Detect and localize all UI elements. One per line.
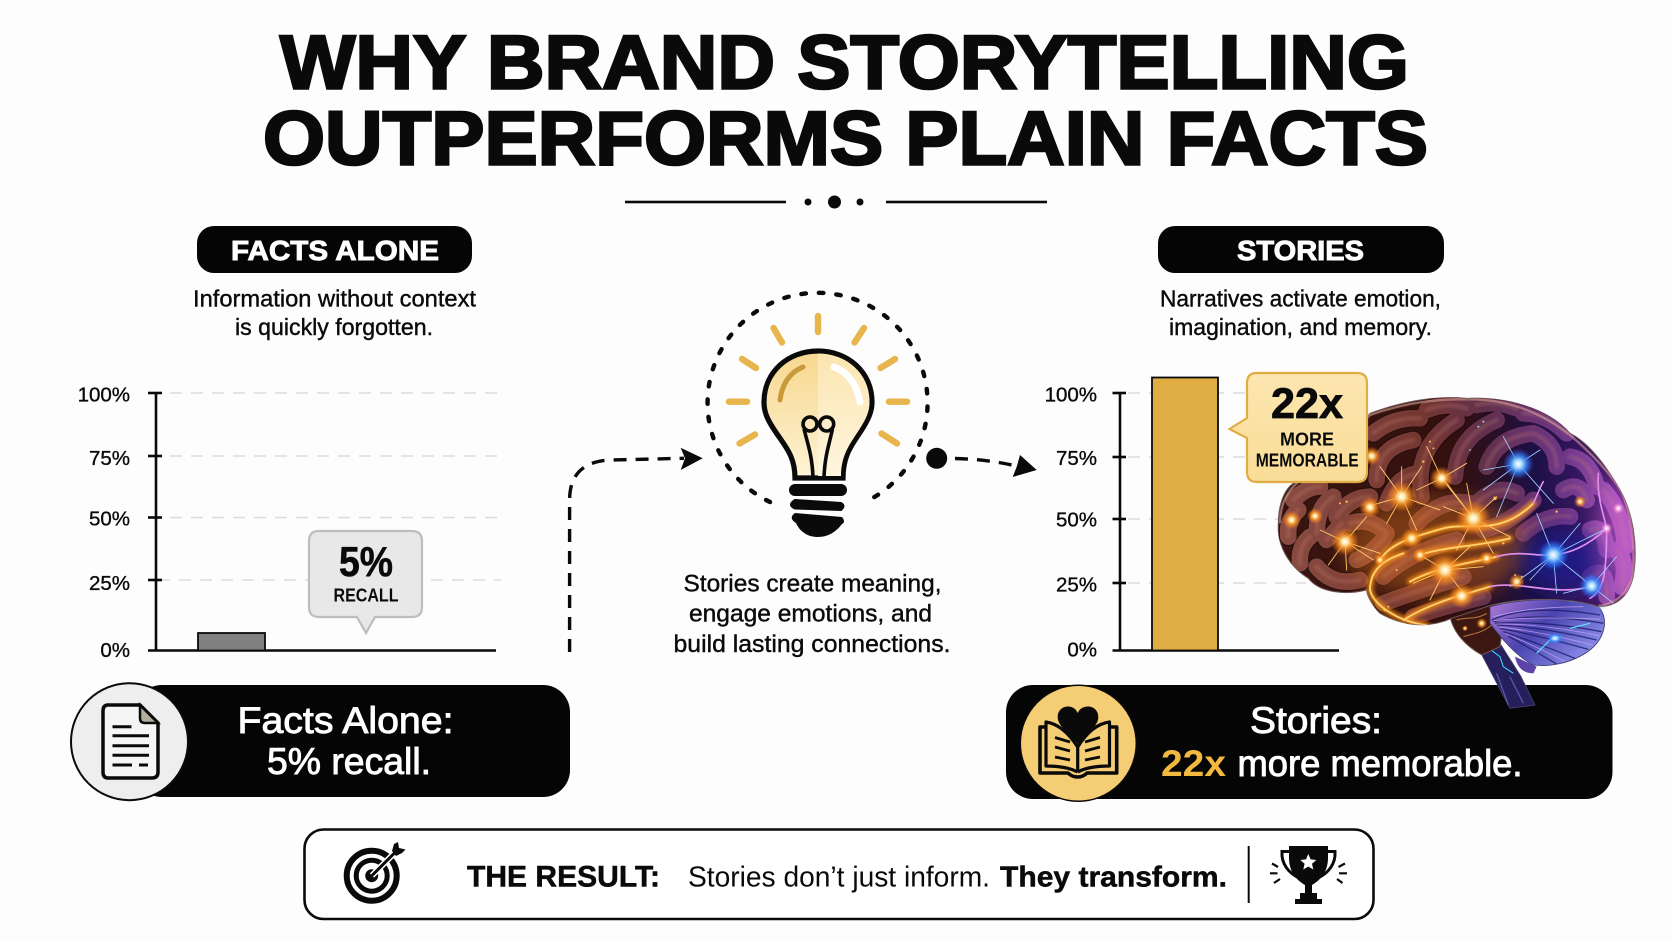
text: stories description: Narratives activate emotion, — [1160, 286, 1441, 312]
icon: book with heart — [1020, 685, 1136, 801]
bar chart: stories memorability: 100% — [1045, 384, 1097, 407]
callout: 22x more memorable: 22x — [1271, 380, 1343, 428]
bar chart: stories memorability — [1045, 378, 1339, 662]
text: facts alone description: Information without context — [193, 286, 477, 312]
arrow: dashed from facts to bulb — [570, 448, 703, 652]
icon: dotted lightbulb — [708, 293, 928, 537]
text: stories description — [1160, 286, 1441, 340]
bar chart: stories memorability: 50% — [1056, 509, 1097, 532]
heading: facts alone: FACTS ALONE — [231, 235, 439, 266]
text: facts alone description — [193, 286, 477, 340]
bar chart: facts recall: 100% — [78, 384, 130, 407]
text: center explanation: build lasting connections. — [674, 631, 950, 658]
text: the result statement: Stories don’t just inform. — [688, 862, 990, 894]
callout: 22x more memorable: MORE — [1280, 430, 1334, 450]
illustration: glowing brain — [1278, 398, 1637, 708]
text: stories description: imagination, and memory. — [1169, 314, 1432, 340]
text: center explanation — [674, 571, 950, 658]
panel: the result banner — [304, 830, 1374, 919]
text: facts alone description: is quickly forgotten. — [235, 314, 433, 340]
arrow: dashed from bulb to stories — [926, 448, 1037, 477]
bar chart: stories memorability: 75% — [1056, 447, 1097, 470]
callout: 5% recall: 5% — [339, 538, 393, 585]
bar chart: facts recall: 50% — [89, 508, 130, 531]
heading: stories: STORIES — [1237, 235, 1364, 266]
title divider — [625, 196, 1047, 208]
brain stem — [1478, 643, 1537, 708]
text: the result statement: They transform. — [1000, 862, 1227, 894]
title — [263, 20, 1428, 182]
heading: facts alone — [197, 226, 472, 273]
bar chart: facts recall — [78, 384, 501, 662]
summary pill: facts alone: Facts Alone: — [238, 700, 454, 741]
title: OUTPERFORMS PLAIN FACTS — [263, 96, 1428, 182]
text: center explanation: engage emotions, and — [689, 601, 932, 628]
summary pill: stories: Stories: — [1250, 700, 1382, 741]
callout: 5% recall — [309, 531, 422, 633]
bar chart: stories memorability: 25% — [1056, 574, 1097, 597]
bar chart: facts recall: 25% — [89, 572, 130, 595]
title: WHY BRAND STORYTELLING — [280, 20, 1409, 106]
summary pill: stories: 22x — [1161, 743, 1226, 784]
summary pill: stories: more memorable. — [1238, 743, 1522, 784]
panel: stories — [1006, 226, 1637, 801]
bar chart: facts recall: 0% — [100, 639, 130, 662]
summary pill: facts alone: 5% recall. — [267, 741, 431, 782]
panel: facts alone — [71, 226, 570, 800]
cerebellum — [1490, 600, 1605, 666]
icon: target with arrow — [347, 842, 406, 901]
text: the result statement — [467, 861, 1227, 894]
text: the result statement: THE RESULT: — [467, 861, 660, 894]
icon: document — [71, 683, 188, 800]
brainstem lobe — [1450, 603, 1503, 655]
cerebrum — [1278, 398, 1635, 625]
bar chart: facts recall: 75% — [89, 447, 130, 470]
callout: 22x more memorable — [1230, 373, 1367, 482]
bar chart: stories memorability: 0% — [1067, 639, 1097, 662]
callout: 5% recall: RECALL — [334, 586, 398, 606]
callout: 22x more memorable: MEMORABLE — [1256, 451, 1359, 471]
summary pill: facts alone — [135, 685, 570, 797]
cortex folds and neural glow — [1280, 399, 1637, 625]
icon: trophy — [1270, 846, 1347, 904]
text: center explanation: Stories create meaning, — [684, 571, 942, 598]
summary pill: stories — [1006, 685, 1612, 799]
heading: stories — [1158, 226, 1444, 273]
